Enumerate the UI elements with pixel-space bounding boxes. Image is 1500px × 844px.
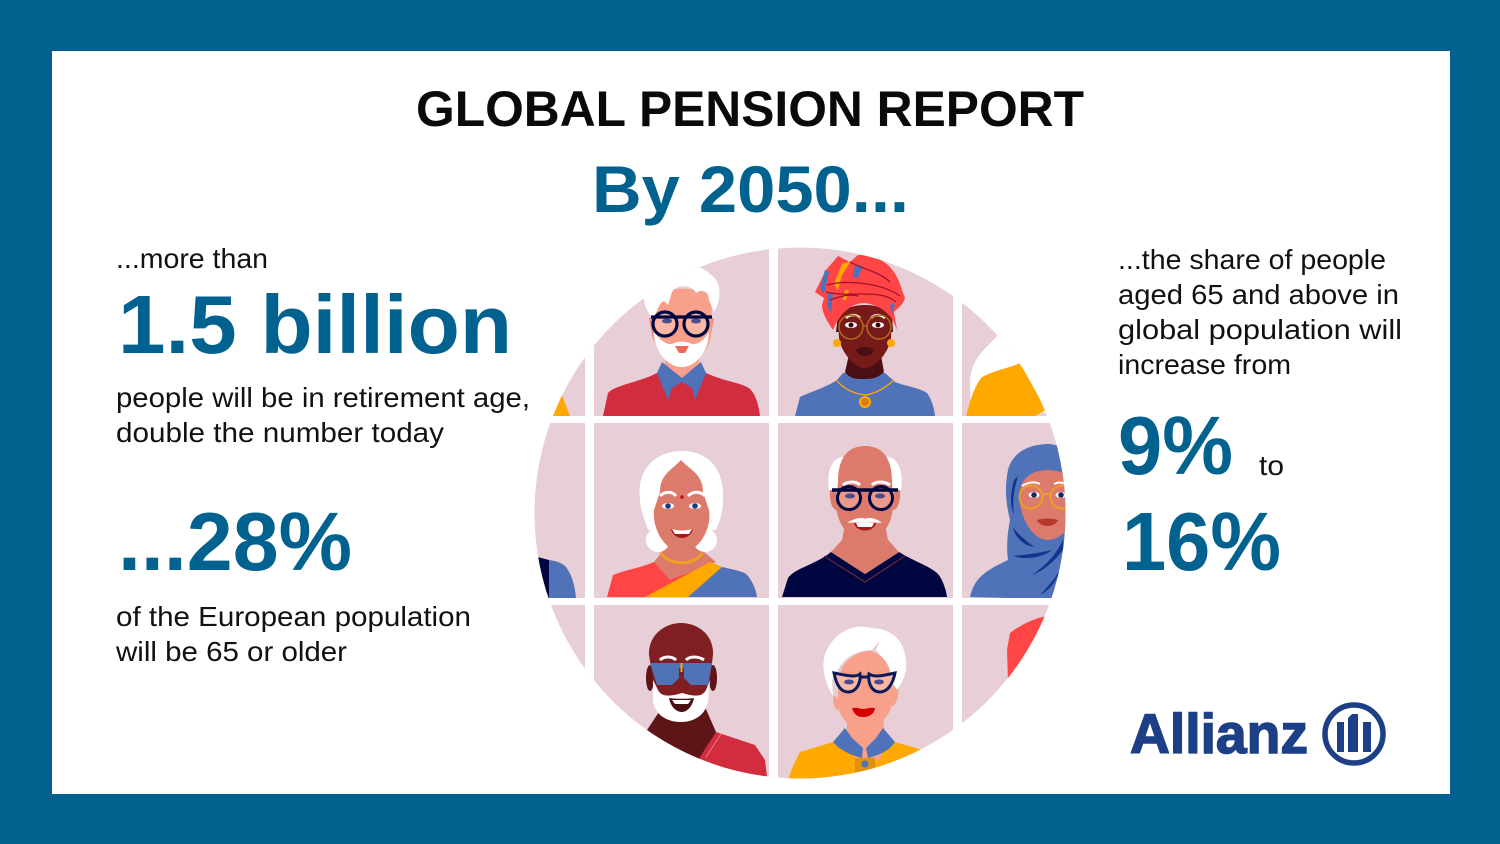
text block: retirement age (116, 243, 530, 448)
portrait: bald man with navy sweater (782, 446, 947, 597)
text block: global share (1118, 244, 1402, 588)
portrait: man with red sweater (603, 265, 760, 416)
text block: global share: to (1259, 450, 1284, 481)
title: GLOBAL PENSION REPORT (416, 81, 1084, 137)
text block: retirement age: ...more than (116, 243, 268, 274)
text block: retirement age: double the number today (116, 417, 444, 448)
portrait: woman with turban (795, 255, 935, 416)
grid gaps (548, 248, 1052, 778)
portrait: woman with hijab (970, 444, 1066, 599)
portrait: man with sunglasses and beard (646, 623, 768, 785)
partial figure: bottom right (1007, 616, 1044, 678)
text block: global share: 16% (1122, 495, 1281, 588)
text block: European population (115, 495, 471, 667)
subtitle: By 2050... (592, 152, 909, 226)
text block: retirement age: people will be in retirement age, (116, 382, 530, 413)
portrait: woman with sari (607, 451, 757, 597)
text block: global share: aged 65 and above in (1118, 279, 1399, 310)
portrait: woman with cat-eye glasses (788, 626, 921, 778)
partial figure: middle left (538, 557, 576, 598)
text block: global share: global population will (1118, 314, 1402, 345)
text block: global share: ...the share of people (1118, 244, 1386, 275)
portrait circle (525, 240, 1080, 790)
text block: European population: ...28% (118, 495, 352, 588)
text block: global share: increase from (1118, 349, 1291, 380)
partial figure: top left (553, 395, 570, 416)
logo: Allianz: Allianz (1130, 702, 1308, 765)
text block: global share: 9% (1118, 399, 1233, 492)
partial figure: top right (966, 336, 1046, 416)
text block: retirement age: 1.5 billion (118, 278, 512, 371)
text block: European population: will be 65 or older (115, 636, 347, 667)
text block: European population: of the European population (116, 601, 471, 632)
